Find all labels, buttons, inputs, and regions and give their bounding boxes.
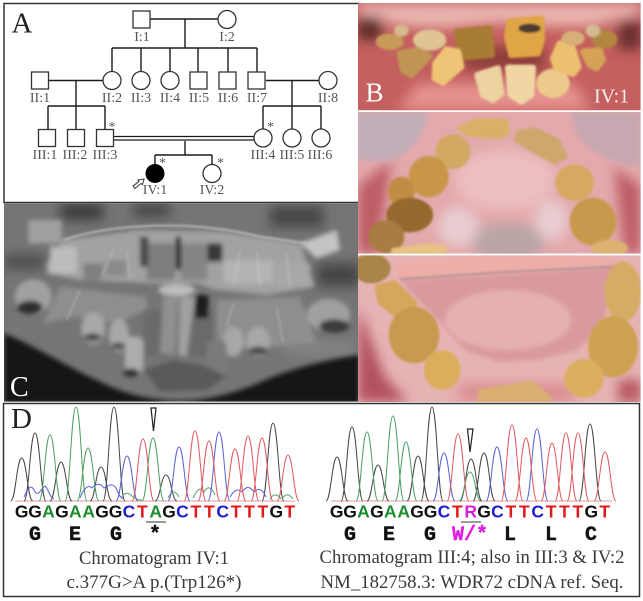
proband arrow — [133, 179, 144, 188]
generation IV symbols — [143, 156, 224, 198]
generation III symbols: III:2 — [63, 148, 87, 163]
sequence III:4: GG — [330, 502, 357, 522]
sequence III:4: A — [357, 502, 370, 522]
generation II symbols: II:1 — [30, 91, 50, 106]
caption IV:1: c.377G>A p.(Trp126*) — [66, 572, 242, 593]
sequence IV:1: G — [55, 502, 69, 522]
generation III symbols: III:5 — [280, 148, 304, 163]
caption IV:1: Chromatogram IV:1 — [79, 548, 229, 569]
generation III symbols: III:6 — [308, 148, 332, 163]
arrowhead marker — [151, 408, 156, 431]
generation I symbols: I:2 — [219, 30, 235, 45]
generation IV symbols: * — [159, 156, 166, 171]
consanguinity double line — [114, 136, 255, 140]
amino acids III:4: C — [585, 524, 597, 547]
sequence IV:1: TTT — [231, 502, 269, 522]
generation IV symbols: * — [217, 156, 224, 171]
amino acids III:4: L — [504, 524, 516, 547]
amino acids III:4 — [344, 524, 597, 547]
sequence III:4: C — [491, 502, 504, 522]
amino acids III:4: E — [383, 524, 395, 547]
generation II symbols: II:5 — [189, 91, 209, 106]
amino acids III:4: L — [545, 524, 557, 547]
generation IV symbols: IV:1 — [143, 183, 167, 198]
amino acids IV:1: E — [69, 524, 81, 547]
sequence III:4: TT — [506, 502, 530, 522]
caption III:4: Chromatogram III:4; also in III:3 & IV:2 — [320, 547, 624, 568]
sequence IV:1: G — [269, 502, 283, 522]
sequence IV:1: C — [216, 502, 229, 522]
panel B: intraoral photographs — [352, 3, 641, 402]
generation II symbols: II:4 — [160, 91, 180, 106]
panel D: chromatograms — [4, 403, 640, 596]
sequence III:4: G — [584, 502, 598, 522]
sequence III:4: R — [464, 502, 477, 522]
sequence IV:1: AA — [69, 502, 95, 522]
sequence III:4: C — [531, 502, 544, 522]
sequence III:4: T — [452, 502, 463, 522]
generation III symbols: * — [108, 120, 116, 135]
generation II symbols: II:2 — [102, 91, 122, 106]
generation IV symbols: IV:2 — [200, 183, 224, 198]
generation III symbols: III:4 — [251, 148, 275, 163]
photo: upper arch view — [358, 112, 641, 260]
sequence IV:1: A — [42, 502, 55, 522]
sequence IV:1: GG — [15, 502, 42, 522]
generation II symbols: II:6 — [218, 91, 238, 106]
generation III symbols: III:3 — [93, 148, 117, 163]
generation III symbols: * — [267, 120, 274, 135]
generation III symbols: III:1 — [33, 148, 57, 163]
amino acids IV:1 — [29, 524, 161, 547]
amino acids IV:1: * — [149, 524, 161, 547]
generation III symbols — [33, 120, 332, 163]
sequence III:4: AA — [384, 502, 410, 522]
sequence III:4: G — [477, 502, 491, 522]
photo: frontal view — [358, 3, 641, 110]
amino acids IV:1: G — [110, 524, 122, 547]
amino acids III:4: G — [344, 524, 356, 547]
amino acids III:4: G — [424, 524, 436, 547]
sequence IV:1: T — [284, 502, 295, 522]
panel C: panoramic x-ray — [4, 203, 360, 403]
panel A: pedigree — [4, 4, 359, 202]
sequence IV:1: C — [176, 502, 189, 522]
sequence IV:1: G — [162, 502, 176, 522]
panel letter A: A — [12, 8, 32, 40]
generation II symbols: II:7 — [247, 91, 267, 106]
caption III:4: NM_182758.3: WDR72 cDNA ref. Seq. — [320, 572, 624, 593]
sequence III:4: C — [438, 502, 451, 522]
sequence IV:1: A — [149, 502, 162, 522]
sequence III:4: TTT — [546, 502, 584, 522]
sequence III:4: GG — [410, 502, 437, 522]
sequence IV:1: T — [137, 502, 148, 522]
generation I symbols: I:1 — [134, 30, 150, 45]
generation II symbols: II:8 — [318, 91, 338, 106]
arrowhead marker — [468, 429, 473, 452]
generation II symbols — [30, 72, 338, 106]
panel letter D: D — [11, 403, 32, 435]
chromatogram IV:1 — [11, 407, 299, 501]
sequence IV:1: C — [123, 502, 136, 522]
sequence III:4: T — [599, 502, 610, 522]
sequence IV:1: GG — [95, 502, 122, 522]
panel letter C: C — [10, 372, 29, 403]
label IV:1: IV:1 — [594, 86, 629, 108]
generation I symbols — [133, 10, 236, 45]
label B: B — [365, 78, 384, 108]
amino acids III:4: W/* — [452, 524, 488, 547]
caption IV:1 — [66, 548, 242, 593]
generation II symbols: II:3 — [131, 91, 151, 106]
caption III:4 — [320, 547, 624, 593]
pedigree connector lines — [48, 19, 321, 165]
photo: lower arch view — [352, 253, 641, 402]
amino acids IV:1: G — [29, 524, 41, 547]
sequence III:4: G — [370, 502, 384, 522]
sequence IV:1: TT — [191, 502, 215, 522]
chromatogram III:4 — [326, 407, 616, 501]
